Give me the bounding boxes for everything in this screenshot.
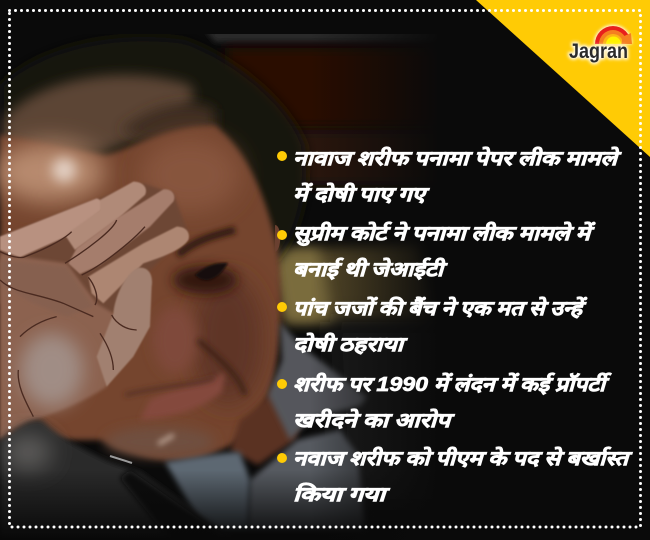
jacket shoulder [0, 420, 235, 540]
point 3 [277, 296, 588, 356]
logo wordmark: Jagran [569, 40, 628, 63]
hand [0, 182, 189, 440]
face [0, 125, 281, 460]
back wall [205, 30, 480, 510]
logo sun [594, 25, 632, 44]
neck and collar [165, 322, 367, 530]
Jagran logo [569, 25, 632, 63]
finger shadow underlay [0, 183, 188, 317]
point 5: नवाज शरीफ को पीएम के पद से बर्खास्त [293, 446, 633, 470]
point 3: दोषी ठहराया [293, 332, 409, 356]
yellow corner triangle [476, 0, 650, 157]
creases [0, 220, 145, 417]
logo wordmark: Jagran [569, 40, 628, 63]
point 3: पांच जजों की बैंच ने एक मत से उन्हें [293, 296, 588, 320]
point 4: खरीदने का आरोप [293, 408, 456, 432]
point 4: शरीफ पर 1990 में लंदन में कई प्रॉपर्टी [293, 372, 612, 396]
point 2: बनाई थी जेआईटी [293, 257, 449, 281]
fades [0, 470, 650, 540]
hair [0, 37, 306, 262]
palm [0, 253, 113, 440]
finger two [65, 182, 146, 250]
point 1: में दोषी पाए गए [293, 182, 430, 206]
point 4 [277, 372, 612, 432]
point 1: नावाज शरीफ पनामा पेपर लीक मामले [293, 146, 622, 170]
point 5 [277, 446, 633, 506]
point 1 [277, 146, 622, 206]
point 5: किया गया [293, 482, 391, 506]
key points list [277, 146, 633, 506]
finger three [68, 189, 174, 274]
point 2: सुप्रीम कोर्ट ने पनामा लीक मामले में [293, 221, 596, 246]
point 2 [277, 221, 596, 281]
thumb [97, 268, 152, 387]
finger four [88, 227, 189, 303]
finger one [0, 198, 103, 257]
